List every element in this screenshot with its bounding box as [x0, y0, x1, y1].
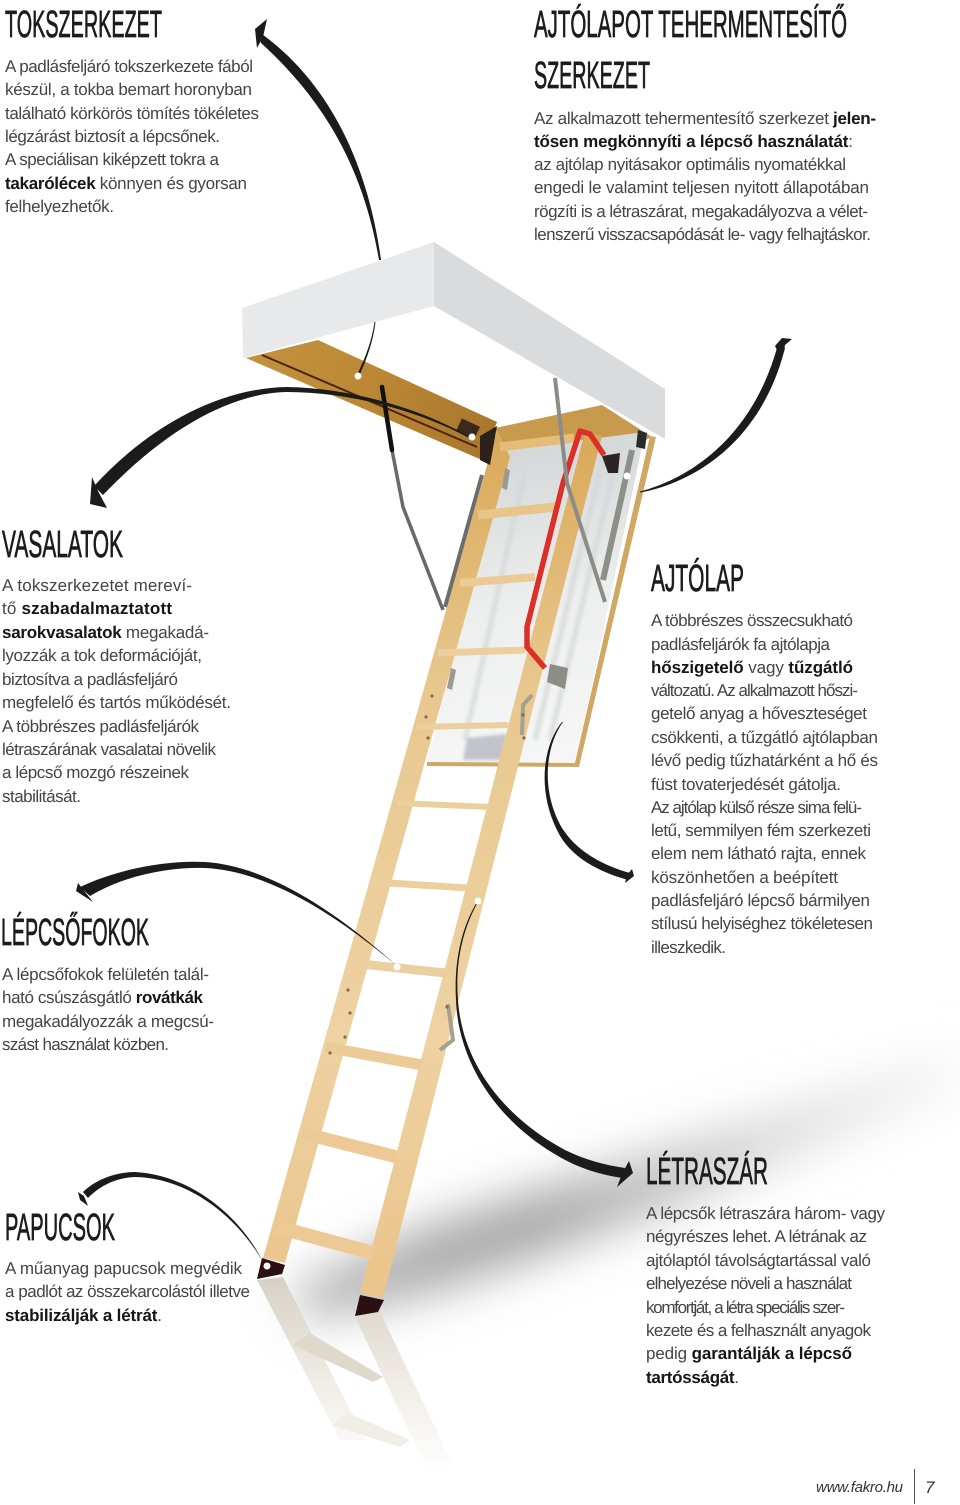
jamb seal line: [262, 355, 477, 447]
text: papucsok: stabilizálják a létrát.: [5, 1306, 162, 1325]
text: létraszár: A lépcsők létraszára három- vagy: [646, 1204, 886, 1223]
text: papucsok: a padlót az összekarcolástól illetve: [5, 1282, 250, 1301]
text: létraszár: négyrészes lehet. A létrának az: [646, 1227, 867, 1246]
text: vasalatok: a lépcső mozgó részeinek: [2, 763, 190, 782]
footer: website and page number: [816, 1469, 935, 1504]
text: ajtólap: getelő anyag a hőveszteséget: [651, 704, 867, 723]
text: lépcsőfokok: [2, 965, 214, 1054]
header of the door frame: [495, 405, 652, 460]
text: lépcsőfokok: szást használat közben.: [2, 1035, 169, 1054]
heading: ajtólap: AJTÓLAP: [651, 558, 744, 600]
text: ajtólap: A többrészes összecsukható: [651, 611, 853, 630]
door panel: [427, 432, 656, 767]
text: ajtólapot tehermentesítő: az ajtólap nyitásakor optimális nyomatékkal: [534, 155, 846, 174]
text: ajtólap: köszönhetően a beépített: [651, 868, 838, 887]
text: tokszerkezet: A padlásfeljáró tokszerkezete fából: [5, 57, 253, 76]
heading: létraszár: LÉTRASZÁR: [646, 1151, 768, 1193]
text: tokszerkezet: felhelyezhetők.: [5, 197, 114, 216]
ceiling box left face: [242, 242, 434, 358]
ladder reflection: [257, 1277, 460, 1480]
callout arrow: tokszerkezet: [255, 19, 381, 374]
callout arrow: vasalatok: [90, 387, 470, 508]
text: ajtólap: hőszigetelő vagy tűzgátló: [651, 658, 853, 677]
callout arrow: papucsok: [78, 1172, 263, 1262]
text: vasalatok: A többrészes padlásfeljárók: [2, 717, 200, 736]
callout anchor dots: [264, 372, 630, 1270]
text: vasalatok: biztosítva a padlásfeljáró: [2, 670, 178, 689]
text: ajtólap: Az ajtólap külső része sima felü-: [651, 798, 862, 817]
text: létraszár: elhelyezése növeli a használat: [646, 1274, 852, 1293]
metal fittings: [328, 387, 647, 1055]
text: ajtólap: csökkenti, a tűzgátló ajtólapban: [651, 728, 878, 747]
text: ajtólapot tehermentesítő: engedi le valamint teljesen nyitott állapotában: [534, 178, 869, 197]
text: ajtólap: stílusú helyiséghez tökéletesen: [651, 914, 873, 933]
text: ajtólapot tehermentesítő: lenszerű visszacsapódását le- vagy felhajtáskor.: [534, 225, 871, 244]
text: vasalatok: lyozzák a tok deformációját,: [2, 646, 202, 665]
heading: papucsok: PAPUCSOK: [5, 1207, 115, 1249]
callout arrow: lépcsőfokok: [76, 862, 397, 966]
text: létraszár: pedig garantálják a lépcső: [646, 1344, 852, 1363]
floor shadow: [290, 1050, 960, 1320]
ladder rungs: [277, 438, 574, 1253]
text: létraszár: ajtólaptól távolságtartással való: [646, 1251, 871, 1270]
text: tokszerkezet: [5, 57, 259, 216]
text: vasalatok: stabilitását.: [2, 787, 81, 806]
text: tokszerkezet: A speciálisan kiképzett tokra a: [5, 150, 220, 169]
callout arrow: létraszár: [456, 902, 633, 1187]
ceiling opening jamb: [246, 340, 497, 460]
text: ajtólap: füst tovaterjedését gátolja.: [651, 775, 841, 794]
text: ajtólapot tehermentesítő: [534, 109, 876, 244]
callout arrow: ajtólapot tehermentesítő: [640, 338, 792, 492]
text: lépcsőfokok: A lépcsőfokok felületén talál-: [2, 965, 209, 984]
ladder right stile: [360, 432, 602, 1298]
text: tokszerkezet: légzárást biztosít a lépcsőnek.: [5, 127, 220, 146]
text: papucsok: [5, 1259, 250, 1325]
text: ajtólap: lévő pedig tűzhatárként a hő és: [651, 751, 878, 770]
text: ajtólap: padlásfeljáró lépcső bármilyen: [651, 891, 870, 910]
heading: vasalatok: VASALATOK: [2, 524, 123, 566]
text: ajtólap: illeszkedik.: [651, 938, 726, 957]
heading: ajtólapot tehermentesítő szerkezet: SZERKEZET: [534, 55, 650, 97]
footer: website and page number: 7: [925, 1478, 935, 1497]
text: tokszerkezet: készül, a tokba bemart horonyban: [5, 80, 252, 99]
text: vasalatok: A tokszerkezetet mereví-: [2, 576, 192, 595]
text: tokszerkezet: található körkörös tömítés tökéletes: [5, 104, 259, 123]
text: ajtólapot tehermentesítő: Az alkalmazott tehermentesítő szerkezet jelen-: [534, 109, 876, 128]
text: lépcsőfokok: ható csúszásgátló rovátkák: [2, 988, 204, 1007]
heading: tokszerkezet: TOKSZERKEZET: [5, 4, 162, 46]
text: vasalatok: sarokvasalatok megakadá-: [2, 623, 209, 642]
text: vasalatok: tő szabadalmaztatott: [2, 599, 172, 618]
red handrail: [527, 431, 604, 668]
ladder left stile: [263, 430, 510, 1263]
ceiling box right face: [434, 242, 665, 439]
left foot: [257, 1258, 285, 1279]
text: ajtólap: változatú. Az alkalmazott hőszi-: [651, 681, 858, 700]
text: ajtólap: letű, semmilyen fém szerkezeti: [651, 821, 871, 840]
text: ajtólap: elem nem látható rajta, ennek: [651, 844, 866, 863]
text: létraszár: komfortját, a létra speciális szer-: [646, 1298, 845, 1317]
text: vasalatok: létraszárának vasalatai növelik: [2, 740, 216, 759]
heading: lépcsőfokok: LÉPCSŐFOKOK: [1, 912, 149, 954]
text: ajtólap: [651, 611, 878, 957]
text: vasalatok: [2, 576, 231, 806]
text: ajtólapot tehermentesítő: tősen megkönnyíti a lépcső használatát:: [534, 132, 853, 151]
text: létraszár: tartósságát.: [646, 1368, 739, 1387]
text: ajtólap: padlásfeljárók fa ajtólapja: [651, 635, 831, 654]
text: létraszár: kezete és a felhasznált anyagok: [646, 1321, 872, 1340]
footer: website and page number: www.fakro.hu: [816, 1479, 904, 1496]
text: ajtólapot tehermentesítő: rögzíti is a létraszárat, megakadályozva a vélet-: [534, 202, 868, 221]
text: tokszerkezet: takarólécek könnyen és gyorsan: [5, 174, 247, 193]
text: papucsok: A műanyag papucsok megvédik: [5, 1259, 242, 1278]
heading: ajtólapot tehermentesítő szerkezet: [534, 4, 847, 97]
right foot: [355, 1295, 384, 1316]
text: lépcsőfokok: megakadályozzák a megcsú-: [2, 1012, 214, 1031]
door label print: [463, 734, 507, 760]
text: vasalatok: megfelelő és tartós működését.: [2, 693, 231, 712]
callout arrow: ajtólap: [545, 722, 634, 883]
text: létraszár: [646, 1204, 886, 1387]
grey door strut: [555, 378, 605, 602]
